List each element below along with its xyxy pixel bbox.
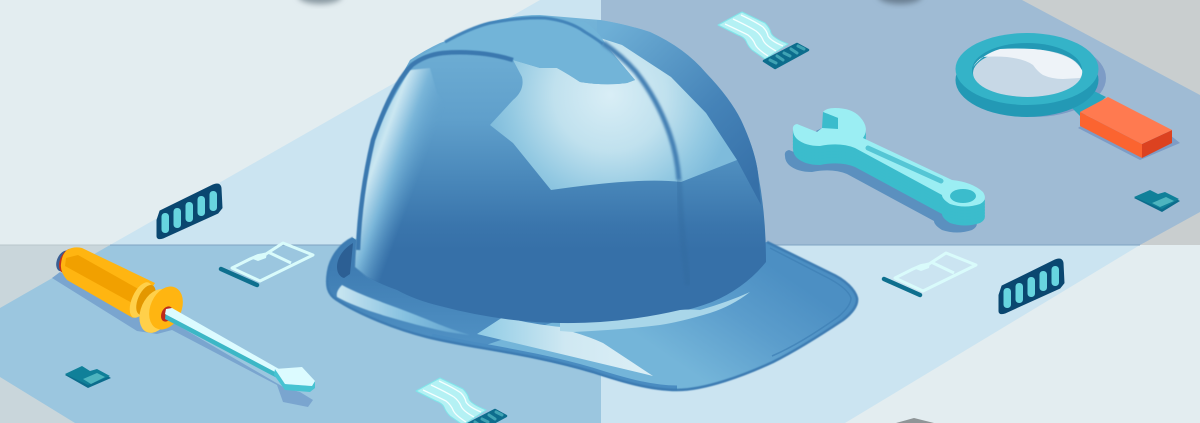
screwdriver	[52, 246, 315, 407]
SIM tray left	[221, 243, 313, 285]
magnifier handle front	[1080, 112, 1142, 158]
SIM tray right	[884, 253, 976, 295]
brim highlight centre	[477, 317, 653, 376]
dome main glare	[490, 37, 737, 190]
dome rib left	[358, 52, 513, 250]
magnifier handle top	[1080, 97, 1172, 144]
magnifier ring top	[956, 33, 1098, 105]
wrench	[785, 108, 985, 232]
lens shine	[973, 48, 1082, 79]
magnifying glass	[956, 33, 1180, 160]
handle dark stripe	[65, 255, 142, 304]
battery left	[157, 184, 222, 239]
magnifier ring side	[956, 43, 1098, 117]
magnifier lens well	[972, 43, 1082, 97]
wrench ring hole	[950, 189, 976, 203]
dome	[355, 15, 766, 323]
dome rib right lower	[679, 180, 688, 285]
tip top	[275, 367, 315, 386]
magnifier neck	[1066, 88, 1106, 118]
hard hat	[327, 15, 857, 390]
brim left section	[327, 238, 560, 347]
wrench face	[793, 108, 985, 206]
brim rim	[327, 238, 857, 390]
brim thin highlight	[560, 292, 750, 332]
screwdriver shadow	[52, 272, 313, 407]
brim inner shadow	[337, 243, 353, 278]
dome rib right	[603, 43, 679, 180]
red ferrule	[159, 304, 175, 324]
shaft top	[165, 308, 279, 373]
memory card right	[1134, 190, 1180, 212]
ribbon cable bottom	[416, 378, 506, 423]
dome rib top	[445, 18, 603, 44]
battery right	[999, 259, 1064, 314]
handle	[61, 247, 155, 318]
brim highlight left	[337, 285, 470, 335]
magnifier lens	[973, 49, 1082, 97]
wrench shadow	[785, 134, 977, 232]
dome left highlight	[355, 68, 470, 306]
handle head	[133, 284, 179, 338]
collar	[125, 279, 157, 321]
dome rear band	[597, 20, 761, 205]
handle end cap	[53, 248, 75, 274]
tip side	[274, 369, 315, 392]
brim rim lower	[432, 336, 677, 388]
ribbon cable top	[718, 12, 808, 68]
wrench side	[793, 112, 985, 226]
magnifier shadow	[962, 39, 1106, 117]
wrench jaw inner	[822, 112, 838, 129]
shaft side	[165, 310, 278, 378]
wrench notch shadow	[816, 128, 830, 133]
hat brim	[327, 238, 857, 390]
wrench slot	[868, 148, 941, 181]
brim inner rim line	[770, 248, 851, 356]
magnifier handle end	[1142, 130, 1172, 158]
dome top lobe	[410, 16, 635, 84]
memory card left	[65, 366, 111, 388]
